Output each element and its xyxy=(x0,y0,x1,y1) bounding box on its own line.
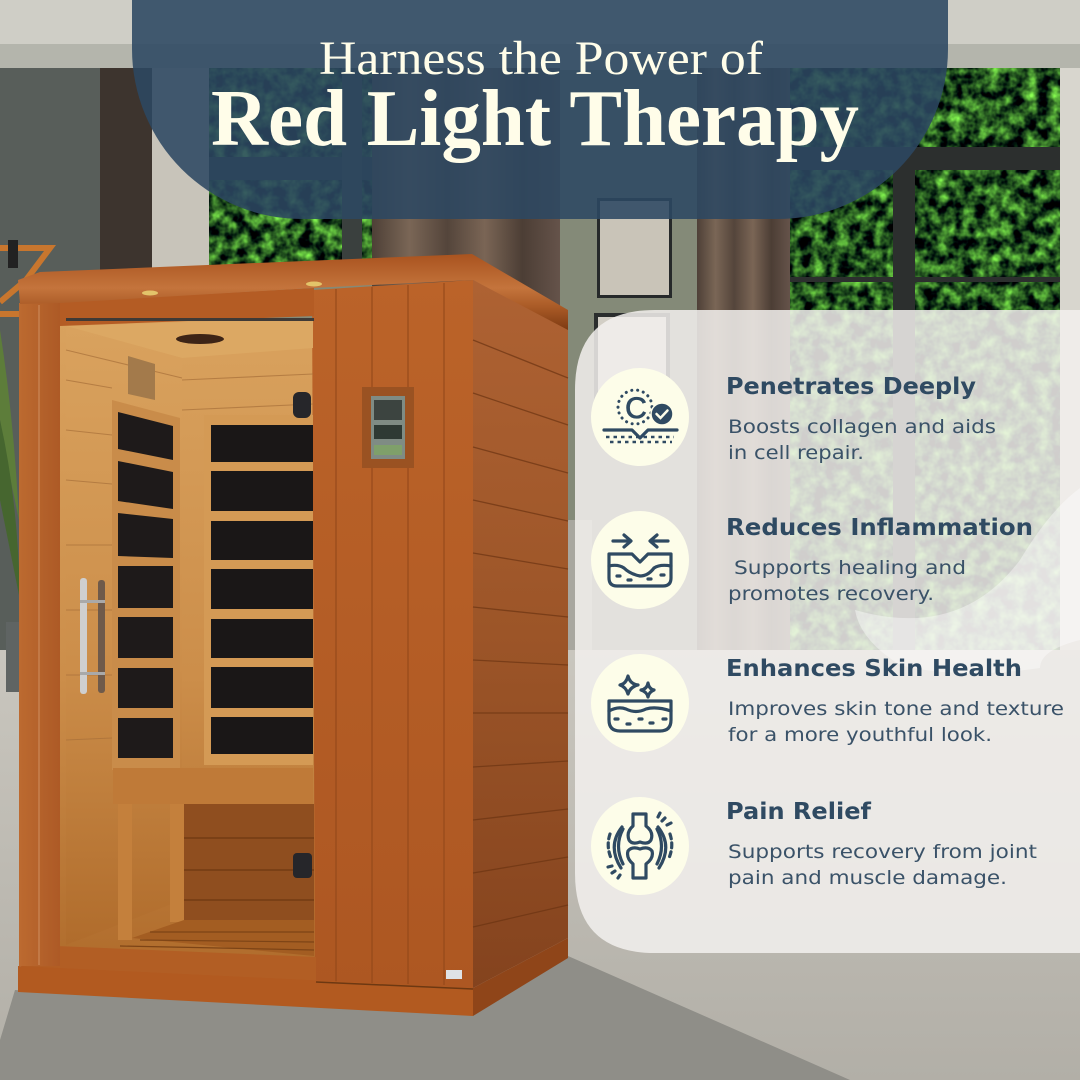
side plinth xyxy=(473,938,568,1016)
door plank lines xyxy=(336,283,444,985)
left door post xyxy=(19,303,60,966)
text: Supports recovery from joint xyxy=(728,841,1037,863)
interior left wall xyxy=(66,326,182,945)
interior back wall xyxy=(56,318,318,968)
control panel xyxy=(362,387,414,468)
benefit: reduces inflammation xyxy=(591,511,1033,609)
title line two: Red Light Therapy xyxy=(211,75,859,163)
crown molding xyxy=(18,254,568,330)
side wall xyxy=(473,280,568,988)
interior plank lines xyxy=(66,350,313,740)
title banner xyxy=(132,0,948,219)
hinges xyxy=(293,392,312,878)
left heater panel xyxy=(112,400,180,770)
icon: collagen skin: C xyxy=(625,392,647,425)
icon: joint xyxy=(591,797,689,895)
heading: Penetrates Deeply xyxy=(726,374,976,400)
header beam xyxy=(60,288,314,326)
heading: Reduces Inflammation xyxy=(726,515,1033,541)
text: Boosts collagen and aids xyxy=(728,416,996,438)
text line two: for a more youthful look. xyxy=(728,724,992,746)
icon: collagen skin xyxy=(591,368,689,466)
threshold step xyxy=(18,946,316,983)
translucent benefits panel xyxy=(575,310,1080,953)
ceiling speaker xyxy=(176,334,224,344)
chair behind panel xyxy=(855,488,1080,673)
icon: glowing skin xyxy=(591,654,689,752)
floor shadow xyxy=(0,956,850,1080)
text line two: promotes recovery. xyxy=(728,583,934,605)
heading: Enhances Skin Health xyxy=(726,656,1022,682)
side plank lines xyxy=(473,340,568,927)
heading: Pain Relief xyxy=(726,799,872,825)
benefit: enhances skin health xyxy=(591,654,1064,752)
bench xyxy=(113,768,314,956)
door handle xyxy=(80,578,105,694)
title line one: Harness the Power of xyxy=(319,32,763,85)
product label xyxy=(446,970,462,979)
text line two: pain and muscle damage. xyxy=(728,867,1007,889)
icon: inflamed skin xyxy=(591,511,689,609)
right heater panel xyxy=(204,415,313,765)
wall label xyxy=(128,356,155,400)
text: Supports healing and xyxy=(734,557,966,579)
text line two: in cell repair. xyxy=(728,442,864,464)
benefit: pain relief xyxy=(591,797,1037,895)
benefit: penetrates deeply xyxy=(591,368,996,466)
sauna cabin xyxy=(18,254,568,1016)
base plinth xyxy=(18,966,473,1016)
door panel xyxy=(312,280,473,989)
plant and lamp at left xyxy=(0,240,50,692)
interior ceiling xyxy=(66,318,313,358)
crown lights xyxy=(142,282,322,296)
text: Improves skin tone and texture xyxy=(728,698,1064,720)
